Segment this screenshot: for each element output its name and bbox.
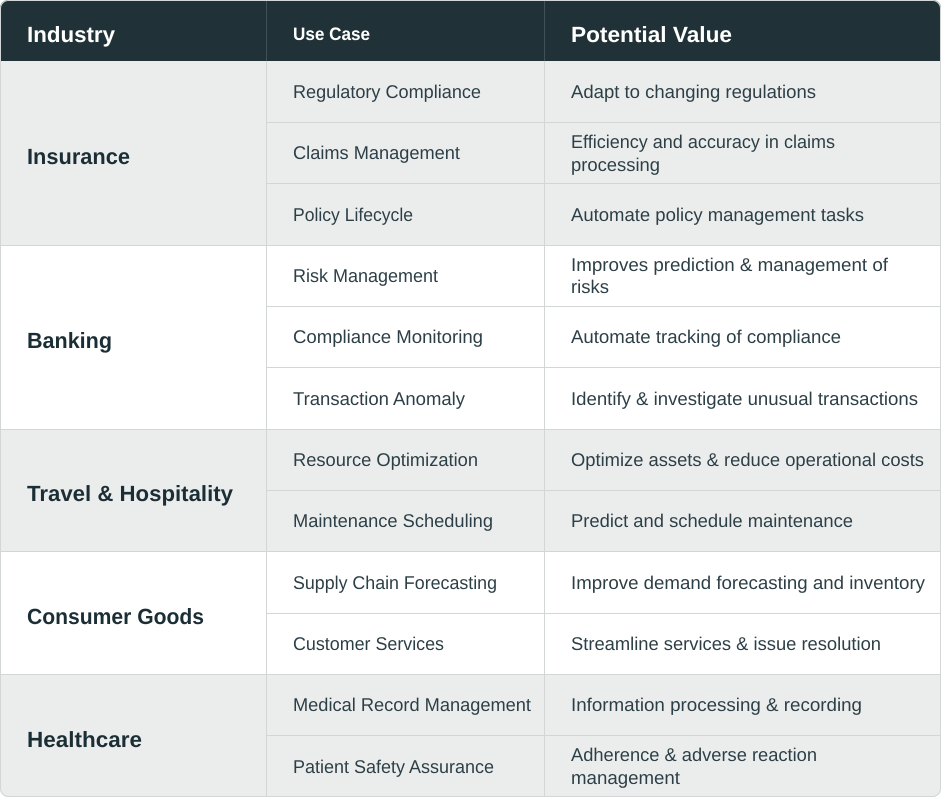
heading: industry: Industry <box>27 22 116 47</box>
row: compliance monitoring <box>293 326 841 347</box>
row: regulatory compliance <box>293 81 816 102</box>
industry label: travel and hospitality: Travel & Hospitality <box>27 481 234 506</box>
row: compliance monitoring: Compliance Monitoring <box>293 326 483 347</box>
row: patient safety assurance <box>293 744 817 788</box>
row: policy lifecycle <box>293 204 864 225</box>
row: policy lifecycle: Automate policy management tasks <box>571 204 864 225</box>
row: compliance monitoring: Automate tracking of compliance <box>571 326 841 347</box>
row: medical record management: Information processing & recording <box>571 694 862 715</box>
industry label: consumer goods: Consumer Goods <box>27 604 204 629</box>
row: resource optimization: Resource Optimization <box>293 449 478 470</box>
row: supply chain forecasting: Improve demand forecasting and inventory <box>571 572 926 593</box>
row: maintenance scheduling: Predict and schedule maintenance <box>571 510 853 531</box>
row: maintenance scheduling: Maintenance Scheduling <box>293 510 493 531</box>
row: customer services: Streamline services & issue resolution <box>571 633 881 654</box>
heading: potential value: Potential Value <box>571 22 732 47</box>
section: banking <box>27 254 918 409</box>
row: medical record management: Medical Record Management <box>293 694 531 715</box>
section: insurance <box>27 81 864 225</box>
row: regulatory compliance: Regulatory Compliance <box>293 81 481 102</box>
row: transaction anomaly: Identify & investigate unusual transactions <box>571 388 918 409</box>
row: risk management <box>293 254 889 297</box>
heading: use case: Use Case <box>293 24 370 44</box>
industry label: insurance: Insurance <box>27 144 130 169</box>
section: travel and hospitality <box>27 449 924 531</box>
row: claims management <box>293 131 835 175</box>
row: risk management: Risk Management <box>293 265 438 286</box>
row: customer services: Customer Services <box>293 633 444 654</box>
row: transaction anomaly <box>293 388 918 409</box>
row: claims management: Claims Management <box>293 142 460 163</box>
row: transaction anomaly: Transaction Anomaly <box>293 388 466 409</box>
header row <box>0 0 941 61</box>
row: resource optimization <box>293 449 924 470</box>
industry label: healthcare: Healthcare <box>27 727 142 752</box>
row: risk management: Improves prediction & management of <box>571 254 889 275</box>
row: customer services <box>293 633 881 654</box>
row: patient safety assurance: management <box>571 767 680 788</box>
row: claims management: Efficiency and accuracy in claims <box>571 131 835 152</box>
row: risk management: risks <box>571 276 609 297</box>
section: consumer goods <box>27 572 926 654</box>
row: maintenance scheduling <box>293 510 853 531</box>
row: supply chain forecasting: Supply Chain Forecasting <box>293 572 497 593</box>
panel: insurance band <box>0 61 941 245</box>
row: patient safety assurance: Patient Safety Assurance <box>293 756 494 777</box>
row: medical record management <box>293 694 862 715</box>
row: resource optimization: Optimize assets & reduce operational costs <box>571 449 924 470</box>
row: policy lifecycle: Policy Lifecycle <box>293 204 413 225</box>
row: claims management: processing <box>571 154 660 175</box>
row: regulatory compliance: Adapt to changing regulations <box>571 81 816 102</box>
section: healthcare <box>27 694 862 788</box>
row: supply chain forecasting <box>293 572 926 593</box>
industry label: banking: Banking <box>27 328 112 353</box>
panel: travel and hospitality band <box>0 429 941 552</box>
panel: healthcare band <box>0 675 941 797</box>
row: patient safety assurance: Adherence & adverse reaction <box>571 744 817 765</box>
